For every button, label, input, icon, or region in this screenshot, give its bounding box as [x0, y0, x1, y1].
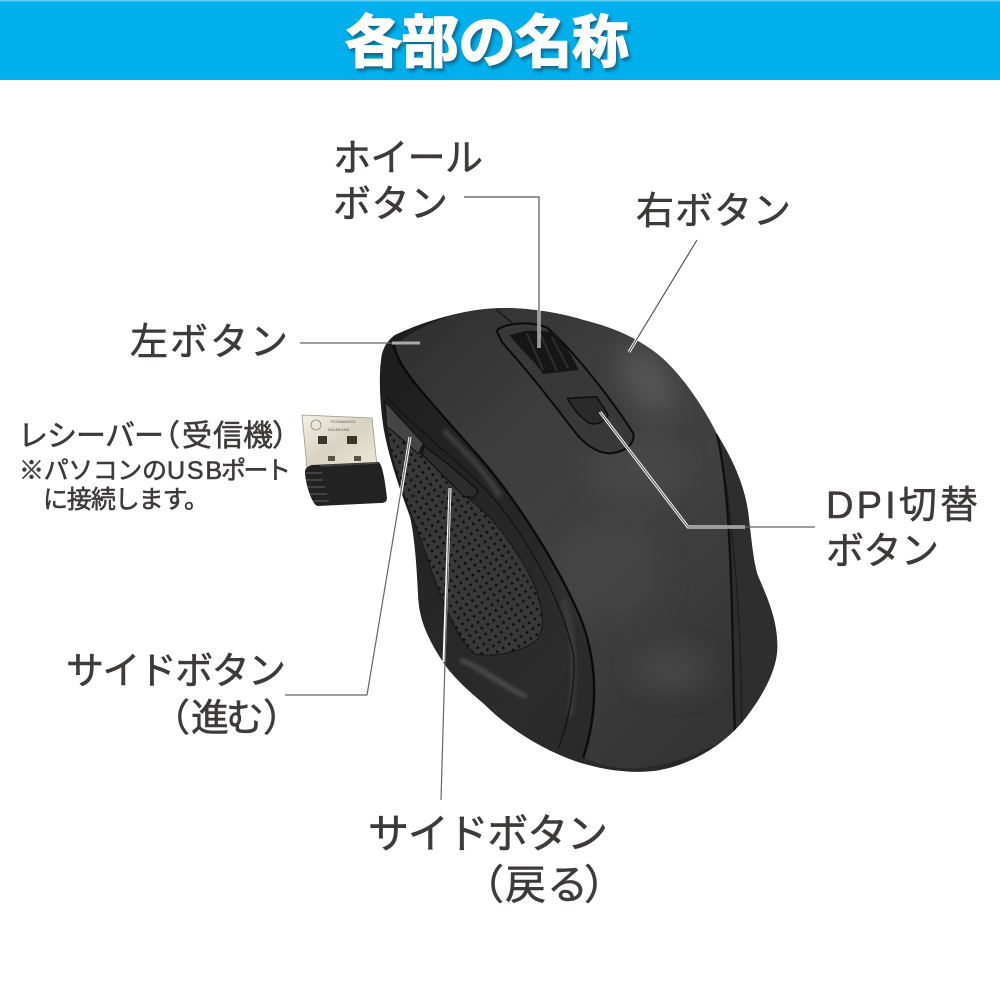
scroll wheel — [509, 331, 578, 374]
note: receiver: ※パソコンの — [19, 457, 167, 485]
mouse body — [380, 308, 777, 772]
line: forward side button — [285, 437, 410, 695]
label: receiver: レシーバー（受信機） — [18, 420, 302, 453]
line: right button — [629, 240, 697, 352]
label: side button forward: サイドボタン — [66, 651, 286, 693]
lower left flank highlight — [460, 660, 527, 697]
line: left button — [300, 342, 420, 344]
plastic body — [305, 462, 387, 506]
USB receiver: POSMAKUS1 — [331, 419, 357, 424]
label: side button back: サイドボタン — [368, 811, 608, 857]
header band — [0, 0, 1000, 80]
top seam — [496, 309, 512, 323]
back side button — [422, 446, 478, 497]
button strip — [497, 323, 634, 453]
line: DPI button — [600, 412, 815, 527]
label: wheel button: ホイール — [333, 138, 483, 180]
title: 各部の名称 — [345, 11, 629, 75]
label: wheel button: ボタン — [333, 184, 448, 226]
line: back side button — [441, 488, 450, 800]
right flank — [717, 433, 777, 733]
note: receiver: ポート — [221, 457, 291, 485]
forward side button — [385, 402, 423, 454]
side grip — [387, 427, 542, 655]
connector — [302, 415, 377, 468]
label: side button back: （戻る） — [463, 862, 625, 908]
label: DPI button: DPI切替 — [826, 485, 978, 527]
callout lines — [285, 197, 815, 800]
note: receiver: に接続します。 — [43, 486, 209, 514]
shell seam lines — [393, 345, 594, 757]
shell highlights — [616, 346, 701, 687]
note: receiver: USB — [167, 457, 222, 485]
label: right button: 右ボタン — [636, 191, 791, 233]
label: side button forward: （進む） — [152, 698, 301, 740]
mouse — [380, 308, 777, 772]
top shell — [395, 308, 735, 768]
DPI button — [567, 397, 608, 424]
USB receiver: 204-B10481 — [328, 427, 351, 432]
USB receiver — [302, 415, 387, 506]
label: left button: 左ボタン — [130, 322, 288, 364]
line: wheel button — [464, 197, 539, 348]
label: DPI button: ボタン — [826, 531, 939, 573]
